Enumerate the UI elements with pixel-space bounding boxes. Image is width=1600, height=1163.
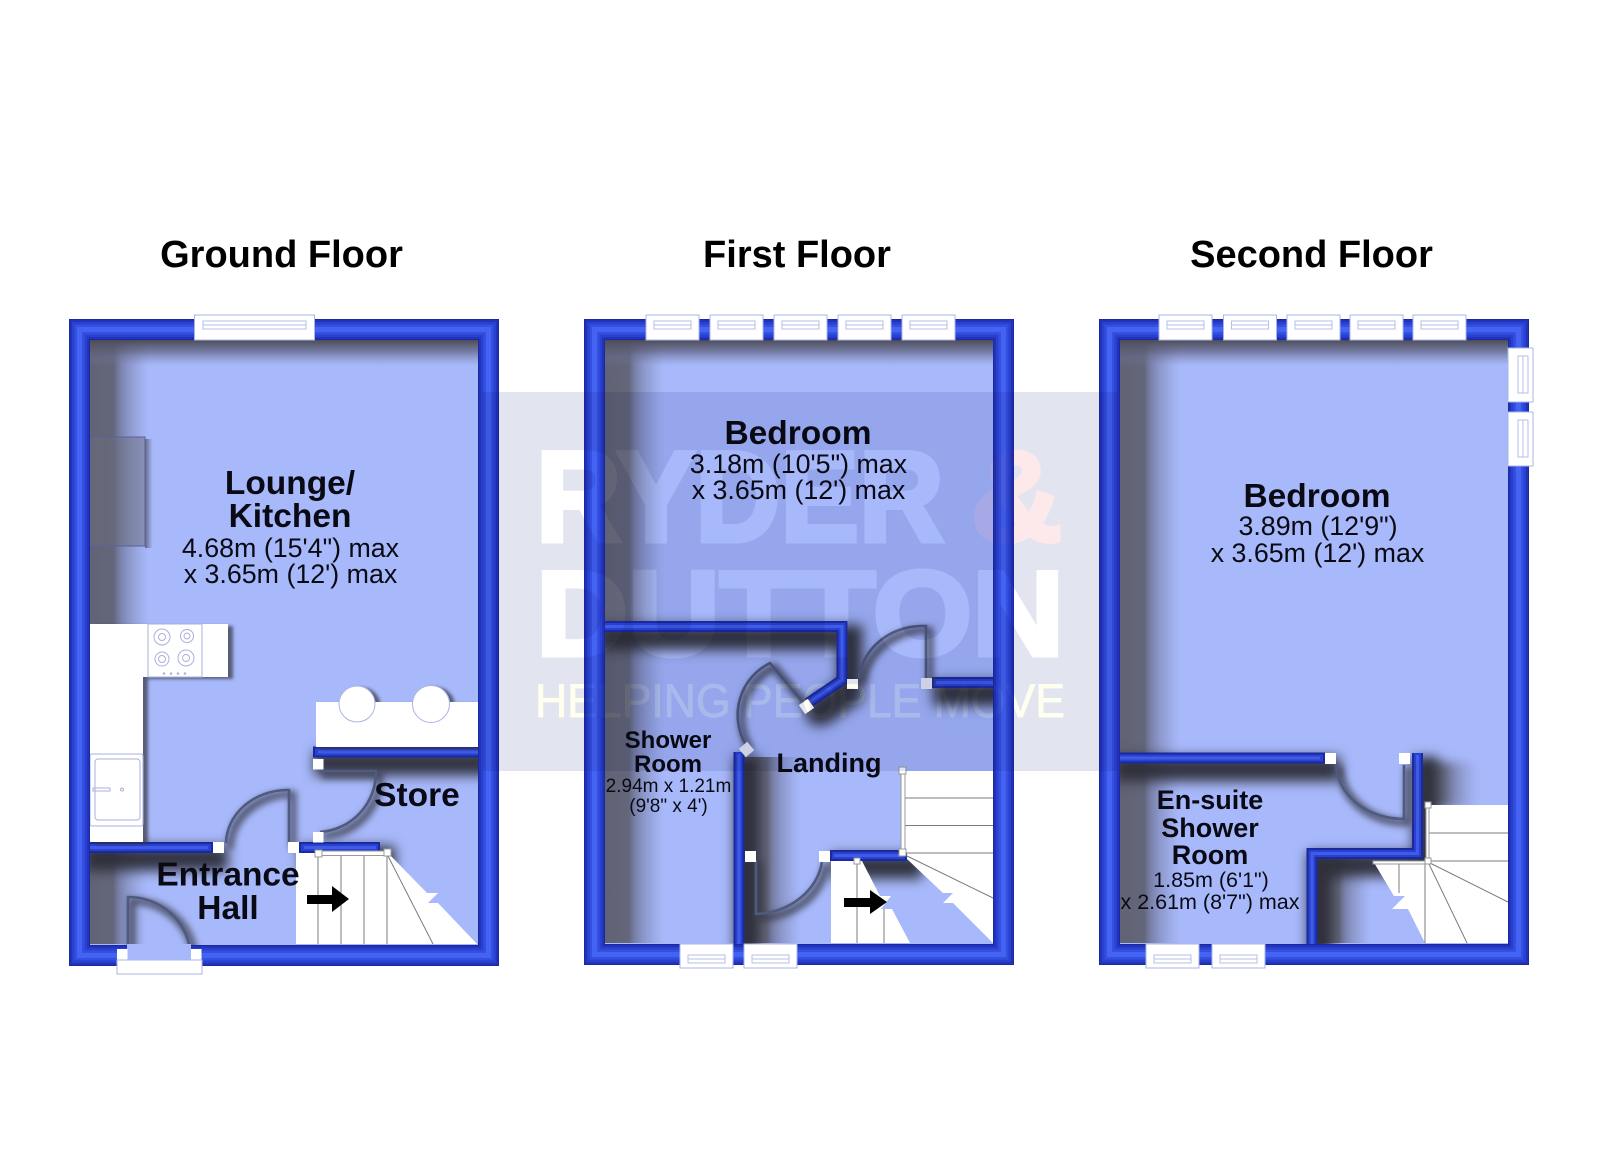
heading: ground floor: Ground Floor [160,234,403,276]
watermark: RYDER [536,426,944,569]
interior walls [1114,753,1418,948]
label: bedroom: x 3.65m (12') max [692,475,906,505]
label: shower room [606,727,731,817]
heading: second floor: Second Floor [1190,234,1433,276]
doors [128,771,376,958]
windows [646,315,955,968]
label: en-suite shower room [1120,785,1300,914]
staircase [1373,802,1508,943]
wall shadows [1120,340,1508,943]
front door [117,944,202,974]
label: bedroom [1211,478,1425,568]
panel: ground floor [80,234,488,974]
staircase [296,849,477,944]
door [1336,764,1404,819]
label: bedroom: 3.89m (12'9") [1238,511,1398,541]
arrow [307,886,349,912]
door jambs [739,678,932,862]
label: store: Store [374,777,460,814]
label: entrance hall: Entrance [156,856,300,894]
label: en-suite shower room: En-suite [1157,785,1263,815]
label: lounge/kitchen: Lounge/ [225,465,355,502]
label: bedroom [690,415,908,505]
outer walls [1110,330,1518,954]
interior walls [598,626,993,950]
label: lounge/kitchen: 4.68m (15'4") max [182,533,400,563]
watermark [482,392,1118,771]
doors [738,626,926,914]
label: lounge/kitchen [182,465,400,589]
label: shower room: Room [634,751,702,778]
panel: second floor [1110,234,1533,968]
label: shower room: 2.94m x 1.21m [606,776,731,797]
label: lounge/kitchen: x 3.65m (12') max [184,559,398,589]
label: lounge/kitchen: Kitchen [229,498,351,535]
panel: first floor [594,234,1004,968]
door jambs [1325,753,1410,764]
sink [90,754,143,826]
heading: first floor: First Floor [703,234,891,276]
watermark: HELPING PEOPLE MOVE [535,674,1065,727]
arrow [844,890,887,914]
staircase [831,767,993,943]
watermark: & [971,426,1062,569]
hob [148,624,202,677]
label: entrance hall: Hall [197,890,259,927]
windows [1146,315,1533,968]
door jambs [213,759,324,853]
label: shower room: (9'8" x 4') [629,796,708,817]
label: en-suite shower room: Room [1172,840,1248,870]
outer walls [80,330,488,956]
label: bedroom: Bedroom [724,415,872,452]
room floor [80,330,488,955]
interior walls [84,752,478,848]
kitchen worktop [90,624,228,842]
outer walls [594,330,1004,954]
label: bedroom: x 3.65m (12') max [1211,538,1425,568]
label: entrance hall [156,856,300,927]
room floor [1110,330,1518,954]
label: bedroom: Bedroom [1243,478,1391,515]
room floor [595,330,1003,954]
label: en-suite shower room: 1.85m (6'1") [1153,868,1269,892]
label: bedroom: 3.18m (10'5") max [690,449,908,479]
label: en-suite shower room: Shower [1161,813,1259,843]
label: landing: Landing [777,748,881,778]
label: en-suite shower room: x 2.61m (8'7") max [1120,890,1300,914]
wall shadows [605,340,993,943]
window [194,315,314,340]
wall shadows [90,340,478,944]
watermark: DUTTON [536,547,1064,681]
chimney recess [90,437,153,548]
breakfast counter [316,686,478,747]
label: shower room: Shower [625,727,711,754]
